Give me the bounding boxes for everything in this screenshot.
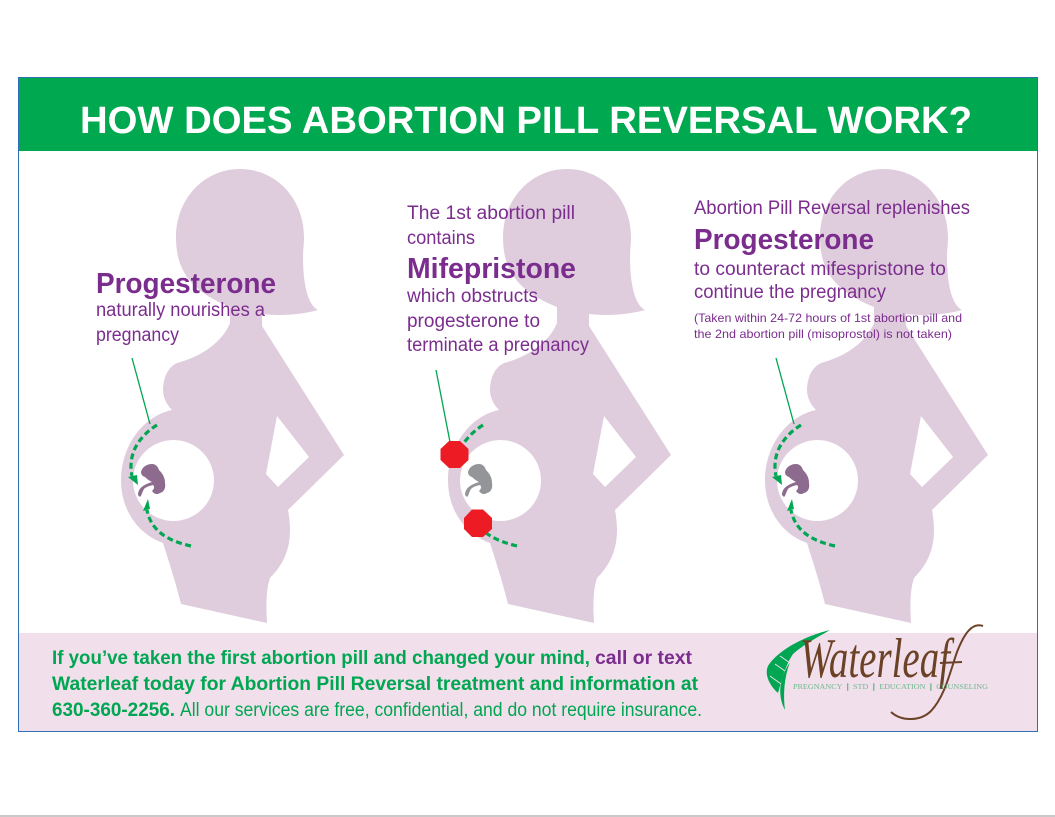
- pointer line: [436, 370, 450, 442]
- silhouette: pregnant woman: [448, 169, 671, 623]
- arrow: upper progesterone flow: [128, 425, 157, 485]
- text: mifepristone explanation: The 1st abortion pill: [407, 203, 575, 224]
- text: mifepristone explanation: [406, 203, 589, 356]
- text: mifepristone explanation: terminate a pregnancy: [407, 335, 589, 356]
- text: progesterone nourishes: naturally nourishes a: [96, 300, 265, 321]
- pointer line: [776, 358, 794, 424]
- text: reversal explanation: to counteract mifespristone to: [694, 259, 946, 280]
- panel: mifepristone: [406, 169, 671, 623]
- text: progesterone nourishes: Progesterone: [96, 268, 276, 300]
- text: reversal explanation: continue the pregnancy: [694, 282, 886, 303]
- title: HOW DOES ABORTION PILL REVERSAL WORK?: [80, 100, 972, 142]
- logo tagline: PREGNANCY ❙ STD ❙ EDUCATION ❙ COUNSELING: [793, 682, 989, 691]
- silhouette: pregnant woman: [765, 169, 988, 623]
- text: progesterone nourishes: pregnancy: [96, 325, 179, 346]
- text: reversal explanation: (Taken within 24-72 hours of 1st abortion pill and: [694, 311, 962, 325]
- icon: stop sign lower: [464, 510, 492, 537]
- pointer line: [132, 358, 150, 424]
- call to action text: 630-360-2256.: [52, 700, 175, 721]
- arrow: lower progesterone flow: [143, 499, 191, 546]
- silhouette: pregnant woman: [121, 169, 344, 623]
- call to action text: All our services are free, confidential, and do not require insurance.: [180, 700, 702, 721]
- bottom edge rule: [0, 815, 1055, 817]
- text: mifepristone explanation: which obstructs: [406, 286, 538, 307]
- icon: fetus: [138, 464, 165, 497]
- text: reversal explanation: Abortion Pill Reversal replenishes: [694, 198, 970, 219]
- wordmark: Waterleaf: [800, 628, 955, 690]
- arrow: blocked lower flow: [486, 533, 517, 546]
- text: mifepristone explanation: progesterone to: [407, 311, 540, 332]
- call to action text: call or text: [595, 648, 693, 669]
- call to action text: Waterleaf today for Abortion Pill Reversal treatment and information at: [52, 674, 699, 695]
- panel: reversal: [694, 169, 988, 623]
- icon: fetus: [465, 464, 492, 497]
- text: reversal explanation: Progesterone: [694, 224, 874, 256]
- panel: natural progesterone: [96, 169, 344, 623]
- icon: leaf: [767, 630, 830, 710]
- swash of the f: [891, 625, 983, 719]
- text: progesterone nourishes: [96, 268, 276, 346]
- logo: Waterleaf: [767, 625, 989, 719]
- text: mifepristone explanation: contains: [407, 228, 475, 249]
- text: reversal explanation: [694, 198, 970, 341]
- footer band: [19, 625, 1037, 731]
- text: reversal explanation: the 2nd abortion pill (misoprostol) is not taken): [694, 327, 952, 341]
- arrow: lower progesterone flow: [787, 499, 835, 546]
- call to action text: [52, 648, 702, 721]
- text: mifepristone explanation: Mifepristone: [407, 253, 576, 285]
- icon: stop sign upper: [440, 441, 468, 468]
- icon: fetus: [782, 464, 809, 497]
- header banner: [19, 78, 1037, 151]
- page frame: [18, 78, 1038, 732]
- arrow: upper progesterone flow: [772, 425, 801, 485]
- arrow: blocked upper flow: [463, 425, 483, 444]
- call to action text: If you’ve taken the first abortion pill and changed your mind,: [52, 648, 590, 669]
